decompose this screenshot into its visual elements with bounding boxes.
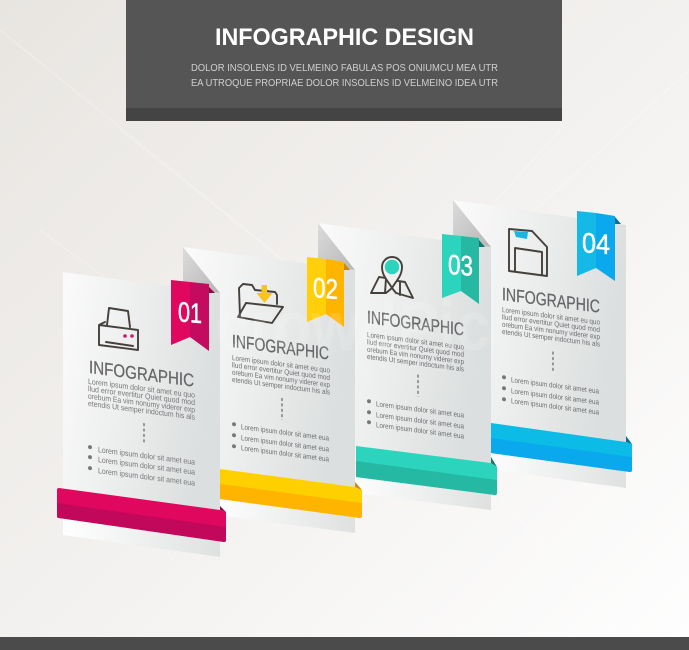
text 02: Lorem ipsum dolor sit amet eua (241, 422, 330, 443)
text 04: etendis Ut semper indoctum his als (502, 327, 600, 349)
band (356, 446, 497, 495)
band (491, 423, 632, 472)
text 04: Lorem ipsum dolor sit amet eua (511, 396, 600, 417)
text 01: Lorem ipsum dolor sit amet eua (98, 466, 196, 488)
text 04: Lorem ipsum dolor sit amet eu quo (502, 305, 600, 327)
text 03: etendis Ut semper indoctum his als (367, 352, 464, 374)
text 03: llud error evertitur Quiet quod mod (367, 337, 464, 359)
ribbon 04: 04 (582, 227, 610, 260)
text 01: orebum Ea vim nonumy viderer exp (88, 392, 196, 415)
ribbon 03 (442, 234, 485, 304)
text 02: orebum Ea vim nonumy viderer exp (232, 368, 330, 389)
ribbon 01: 01 (178, 296, 202, 329)
header panel (126, 0, 562, 121)
icon: map pin (371, 257, 413, 298)
text 02: Lorem ipsum dolor sit amet eua (241, 433, 330, 454)
text 01: Lorem ipsum dolor sit amet eua (98, 455, 196, 477)
header title: INFOGRAPHIC DESIGN (215, 24, 474, 51)
card 02 (183, 247, 362, 533)
text 01 (88, 357, 196, 488)
ribbon 02: 02 (313, 272, 338, 305)
watermark: crowdPic (215, 287, 490, 365)
text 04: INFOGRAPHIC (502, 284, 600, 317)
band (220, 469, 362, 518)
text 03: Lorem ipsum dolor sit amet eua (376, 399, 465, 420)
ribbon 01 (171, 280, 215, 351)
text 02: llud error evertitur Quiet quod mod (232, 360, 330, 382)
text 01: llud error evertitur Quiet quod mod (88, 384, 195, 407)
header subtitle (191, 62, 498, 89)
card 03 (318, 223, 497, 510)
text 02: etendis Ut semper indoctum his als (232, 375, 330, 397)
text 03: orebum Ea vim nonumy viderer exp (367, 345, 464, 366)
ribbon 02 (307, 257, 350, 327)
text 03: Lorem ipsum dolor sit amet eua (376, 420, 465, 441)
text 02: Lorem ipsum dolor sit amet eua (241, 443, 330, 464)
text 01: Lorem ipsum dolor sit amet eu quo (88, 377, 196, 400)
text 03: Lorem ipsum dolor sit amet eua (376, 410, 465, 431)
header subtitle: DOLOR INSOLENS ID VELMEINO FABULAS POS ONIUMCU MEA UTR (191, 62, 498, 74)
card 01 (57, 272, 226, 557)
text 04: Lorem ipsum dolor sit amet eua (511, 386, 600, 407)
icon: printer (99, 308, 138, 350)
icon: folder (238, 284, 283, 323)
text 02: INFOGRAPHIC (232, 331, 329, 364)
text 04: orebum Ea vim nonumy viderer exp (502, 320, 600, 341)
card 04 (453, 200, 632, 488)
ribbon 03: 03 (448, 249, 473, 282)
icon: floppy disk (509, 229, 547, 276)
footer bar (0, 637, 689, 650)
text 03: Lorem ipsum dolor sit amet eu quo (367, 330, 464, 352)
text 01: etendis Ut semper indoctum his als (88, 399, 195, 422)
text 01: Lorem ipsum dolor sit amet eua (98, 445, 196, 467)
text 03 (367, 307, 465, 441)
ribbon 04 (577, 211, 621, 281)
header subtitle: EA UTROQUE PROPRIAE DOLOR INSOLENS ID VELMEINO IDEA UTR (191, 77, 498, 89)
text 04 (502, 284, 600, 417)
text 03: INFOGRAPHIC (367, 307, 464, 340)
text 02: Lorem ipsum dolor sit amet eu quo (232, 353, 330, 375)
band (57, 488, 226, 542)
text 02 (232, 331, 330, 464)
text 04: llud error evertitur Quiet quod mod (502, 312, 600, 334)
text 04: Lorem ipsum dolor sit amet eua (511, 375, 600, 396)
text 01: INFOGRAPHIC (89, 357, 194, 391)
